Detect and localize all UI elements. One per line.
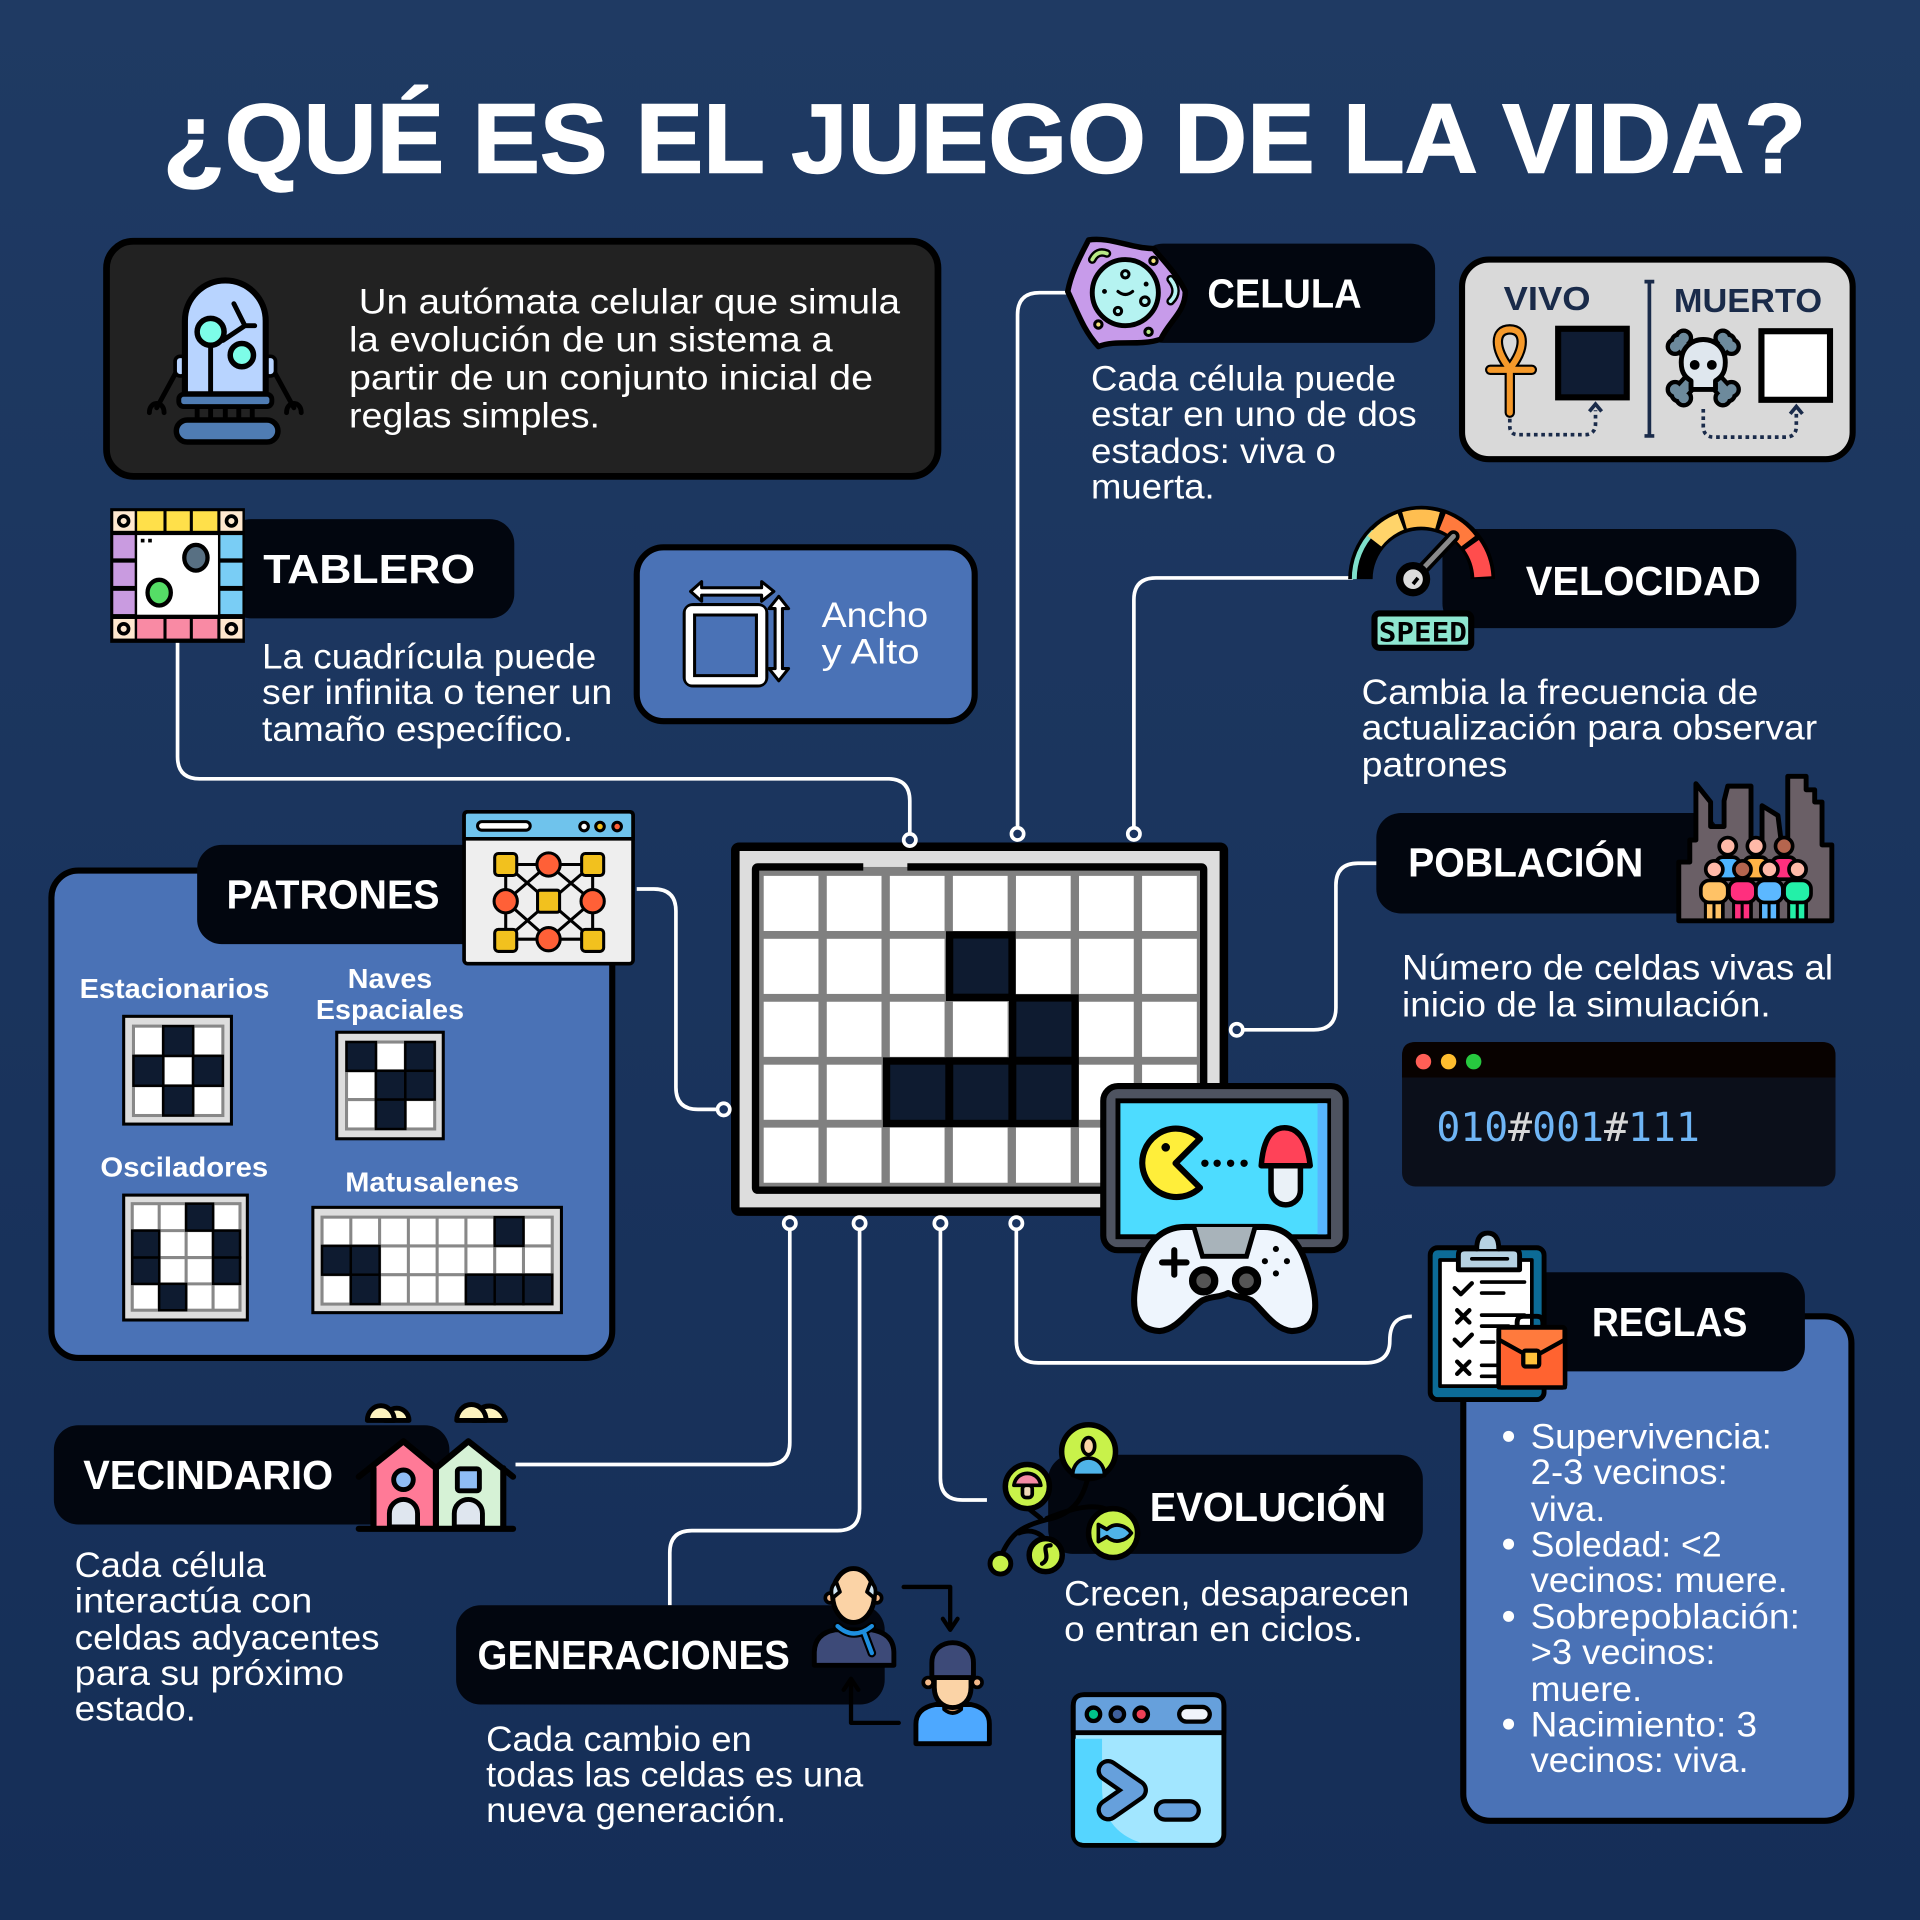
celula description xyxy=(1091,360,1417,506)
label: naves espaciales: Espaciales xyxy=(316,994,464,1025)
panel: vecindario xyxy=(54,1404,513,1728)
title: ¿QUÉ ES EL JUEGO DE LA VIDA? xyxy=(163,84,1806,194)
panel: velocidad xyxy=(1354,518,1818,784)
central grid xyxy=(735,847,1224,1212)
reglas list: Soledad: <2 xyxy=(1531,1525,1722,1564)
label: naves espaciales xyxy=(316,963,464,1025)
grid: osciladores xyxy=(124,1195,247,1320)
grid: matusalenes xyxy=(313,1207,561,1313)
reglas list: >3 vecinos: xyxy=(1531,1633,1716,1672)
intro text: partir de un conjunto inicial de xyxy=(349,358,873,397)
celula description: Cada célula puede xyxy=(1091,360,1396,399)
icon: robot xyxy=(149,280,301,442)
grid: naves espaciales xyxy=(337,1032,443,1139)
icon: crowd in city xyxy=(1679,776,1832,921)
velocidad description xyxy=(1362,673,1818,784)
ancho y alto text: Ancho xyxy=(822,596,928,635)
generaciones description: nueva generación. xyxy=(486,1791,786,1830)
ancho y alto text xyxy=(822,596,928,672)
velocidad description: Cambia la frecuencia de xyxy=(1362,673,1758,712)
reglas label: REGLAS xyxy=(1592,1299,1747,1345)
celula description: estar en uno de dos xyxy=(1091,395,1417,434)
connector lines xyxy=(178,293,1412,1605)
patrones label: PATRONES xyxy=(227,872,440,918)
celula description: estados: viva o xyxy=(1091,432,1336,471)
evolucion description xyxy=(1064,1574,1409,1649)
label: naves espaciales: Naves xyxy=(348,963,432,994)
vecindario heading pill xyxy=(54,1425,449,1524)
icon: speedometer: SPEED xyxy=(1379,618,1467,649)
tablero description: tamaño específico. xyxy=(262,710,573,749)
evolucion description: o entran en ciclos. xyxy=(1064,1610,1363,1649)
intro text xyxy=(349,282,901,435)
icon: speedometer xyxy=(1354,518,1483,649)
dotted arrows xyxy=(1510,404,1802,437)
evolucion description: Crecen, desaparecen xyxy=(1064,1574,1409,1613)
celula label: CELULA xyxy=(1207,270,1362,316)
velocidad heading pill xyxy=(1442,529,1796,628)
panel: poblacion xyxy=(1376,776,1836,1187)
label: estacionarios: Estacionarios xyxy=(80,973,269,1004)
intro text: la evolución de un sistema a xyxy=(349,320,833,359)
generaciones label: GENERACIONES xyxy=(478,1632,790,1678)
panel: celula xyxy=(1068,239,1435,506)
tablero description: La cuadrícula puede xyxy=(262,638,596,677)
ancho y alto text: y Alto xyxy=(822,633,920,672)
evolucion heading pill xyxy=(1048,1455,1423,1554)
reglas list: 2-3 vecinos: xyxy=(1531,1453,1728,1492)
generaciones description xyxy=(486,1720,864,1830)
vecindario description: Cada célula xyxy=(75,1546,266,1585)
tablero label: TABLERO xyxy=(263,546,475,592)
celula description: muerta. xyxy=(1091,467,1215,506)
panel: generaciones xyxy=(456,1569,989,1830)
panel: evolucion xyxy=(990,1425,1423,1649)
tablero description xyxy=(262,638,612,749)
poblacion description: Número de celdas vivas al xyxy=(1402,949,1833,988)
reglas list: Sobrepoblación: xyxy=(1531,1598,1800,1637)
reglas heading pill xyxy=(1518,1272,1805,1371)
reglas list xyxy=(1503,1418,1800,1780)
celula heading pill xyxy=(1139,244,1435,343)
generaciones description: todas las celdas es una xyxy=(486,1756,864,1795)
dead cell xyxy=(1761,331,1830,400)
reglas list: vecinos: muere. xyxy=(1531,1561,1788,1600)
reglas list: Supervivencia: xyxy=(1531,1418,1772,1457)
icon: cell xyxy=(1068,239,1185,347)
reglas list: Nacimiento: 3 xyxy=(1531,1705,1757,1744)
vecindario description xyxy=(75,1546,380,1728)
vecindario description: celdas adyacentes xyxy=(75,1618,380,1657)
grid: estacionarios xyxy=(124,1016,231,1124)
vecindario description: interactúa con xyxy=(75,1582,312,1621)
icon: game screen and controller xyxy=(1103,1086,1346,1331)
divider xyxy=(1644,282,1654,436)
icon: terminal xyxy=(1073,1695,1224,1845)
icon: evolution tree xyxy=(990,1425,1138,1574)
generaciones heading pill xyxy=(456,1605,885,1704)
icon: generations xyxy=(814,1569,989,1744)
patrones heading pill xyxy=(197,845,503,944)
reglas list: viva. xyxy=(1531,1490,1605,1529)
label: matusalenes: Matusalenes xyxy=(345,1166,519,1197)
panel: tablero xyxy=(110,508,612,749)
icon: resize xyxy=(689,582,789,681)
intro text: reglas simples. xyxy=(349,396,600,435)
label: osciladores: Osciladores xyxy=(100,1152,268,1183)
icon: skull and bones xyxy=(1668,331,1739,405)
vecindario description: estado. xyxy=(75,1689,196,1728)
evolucion label: EVOLUCIÓN xyxy=(1150,1484,1386,1530)
poblacion heading pill xyxy=(1376,813,1719,913)
icon: ankh xyxy=(1490,329,1532,413)
icon: pattern window xyxy=(464,812,633,964)
poblacion label: POBLACIÓN xyxy=(1408,840,1643,886)
tablero heading pill xyxy=(227,519,514,618)
panel: ancho y alto xyxy=(637,547,975,721)
muerto label: MUERTO xyxy=(1674,283,1822,320)
alive cell xyxy=(1558,329,1627,397)
reglas list: vecinos: viva. xyxy=(1531,1741,1749,1780)
panel: vivo / muerto xyxy=(1462,260,1853,459)
icon: clipboard and briefcase xyxy=(1430,1233,1565,1400)
panel: patrones xyxy=(51,812,633,1358)
vecindario label: VECINDARIO xyxy=(83,1452,333,1498)
panel: intro xyxy=(107,241,938,476)
poblacion description: inicio de la simulación. xyxy=(1402,985,1771,1024)
reglas list: muere. xyxy=(1531,1670,1642,1709)
vecindario description: para su próximo xyxy=(75,1654,344,1693)
poblacion description xyxy=(1402,949,1833,1024)
velocidad description: actualización para observar xyxy=(1362,709,1818,748)
panel: reglas xyxy=(1430,1233,1851,1821)
velocidad label: VELOCIDAD xyxy=(1526,558,1761,604)
tablero description: ser infinita o tener un xyxy=(262,673,612,712)
generaciones description: Cada cambio en xyxy=(486,1720,752,1759)
code window xyxy=(1402,1042,1836,1187)
icon: board game xyxy=(110,508,245,643)
code window: 010#001#111 xyxy=(1436,1105,1700,1151)
icon: houses xyxy=(359,1404,513,1529)
velocidad description: patrones xyxy=(1362,745,1507,784)
vivo label: VIVO xyxy=(1504,281,1591,318)
intro text: Un autómata celular que simula xyxy=(359,282,901,321)
connector end dots xyxy=(718,828,1243,1229)
